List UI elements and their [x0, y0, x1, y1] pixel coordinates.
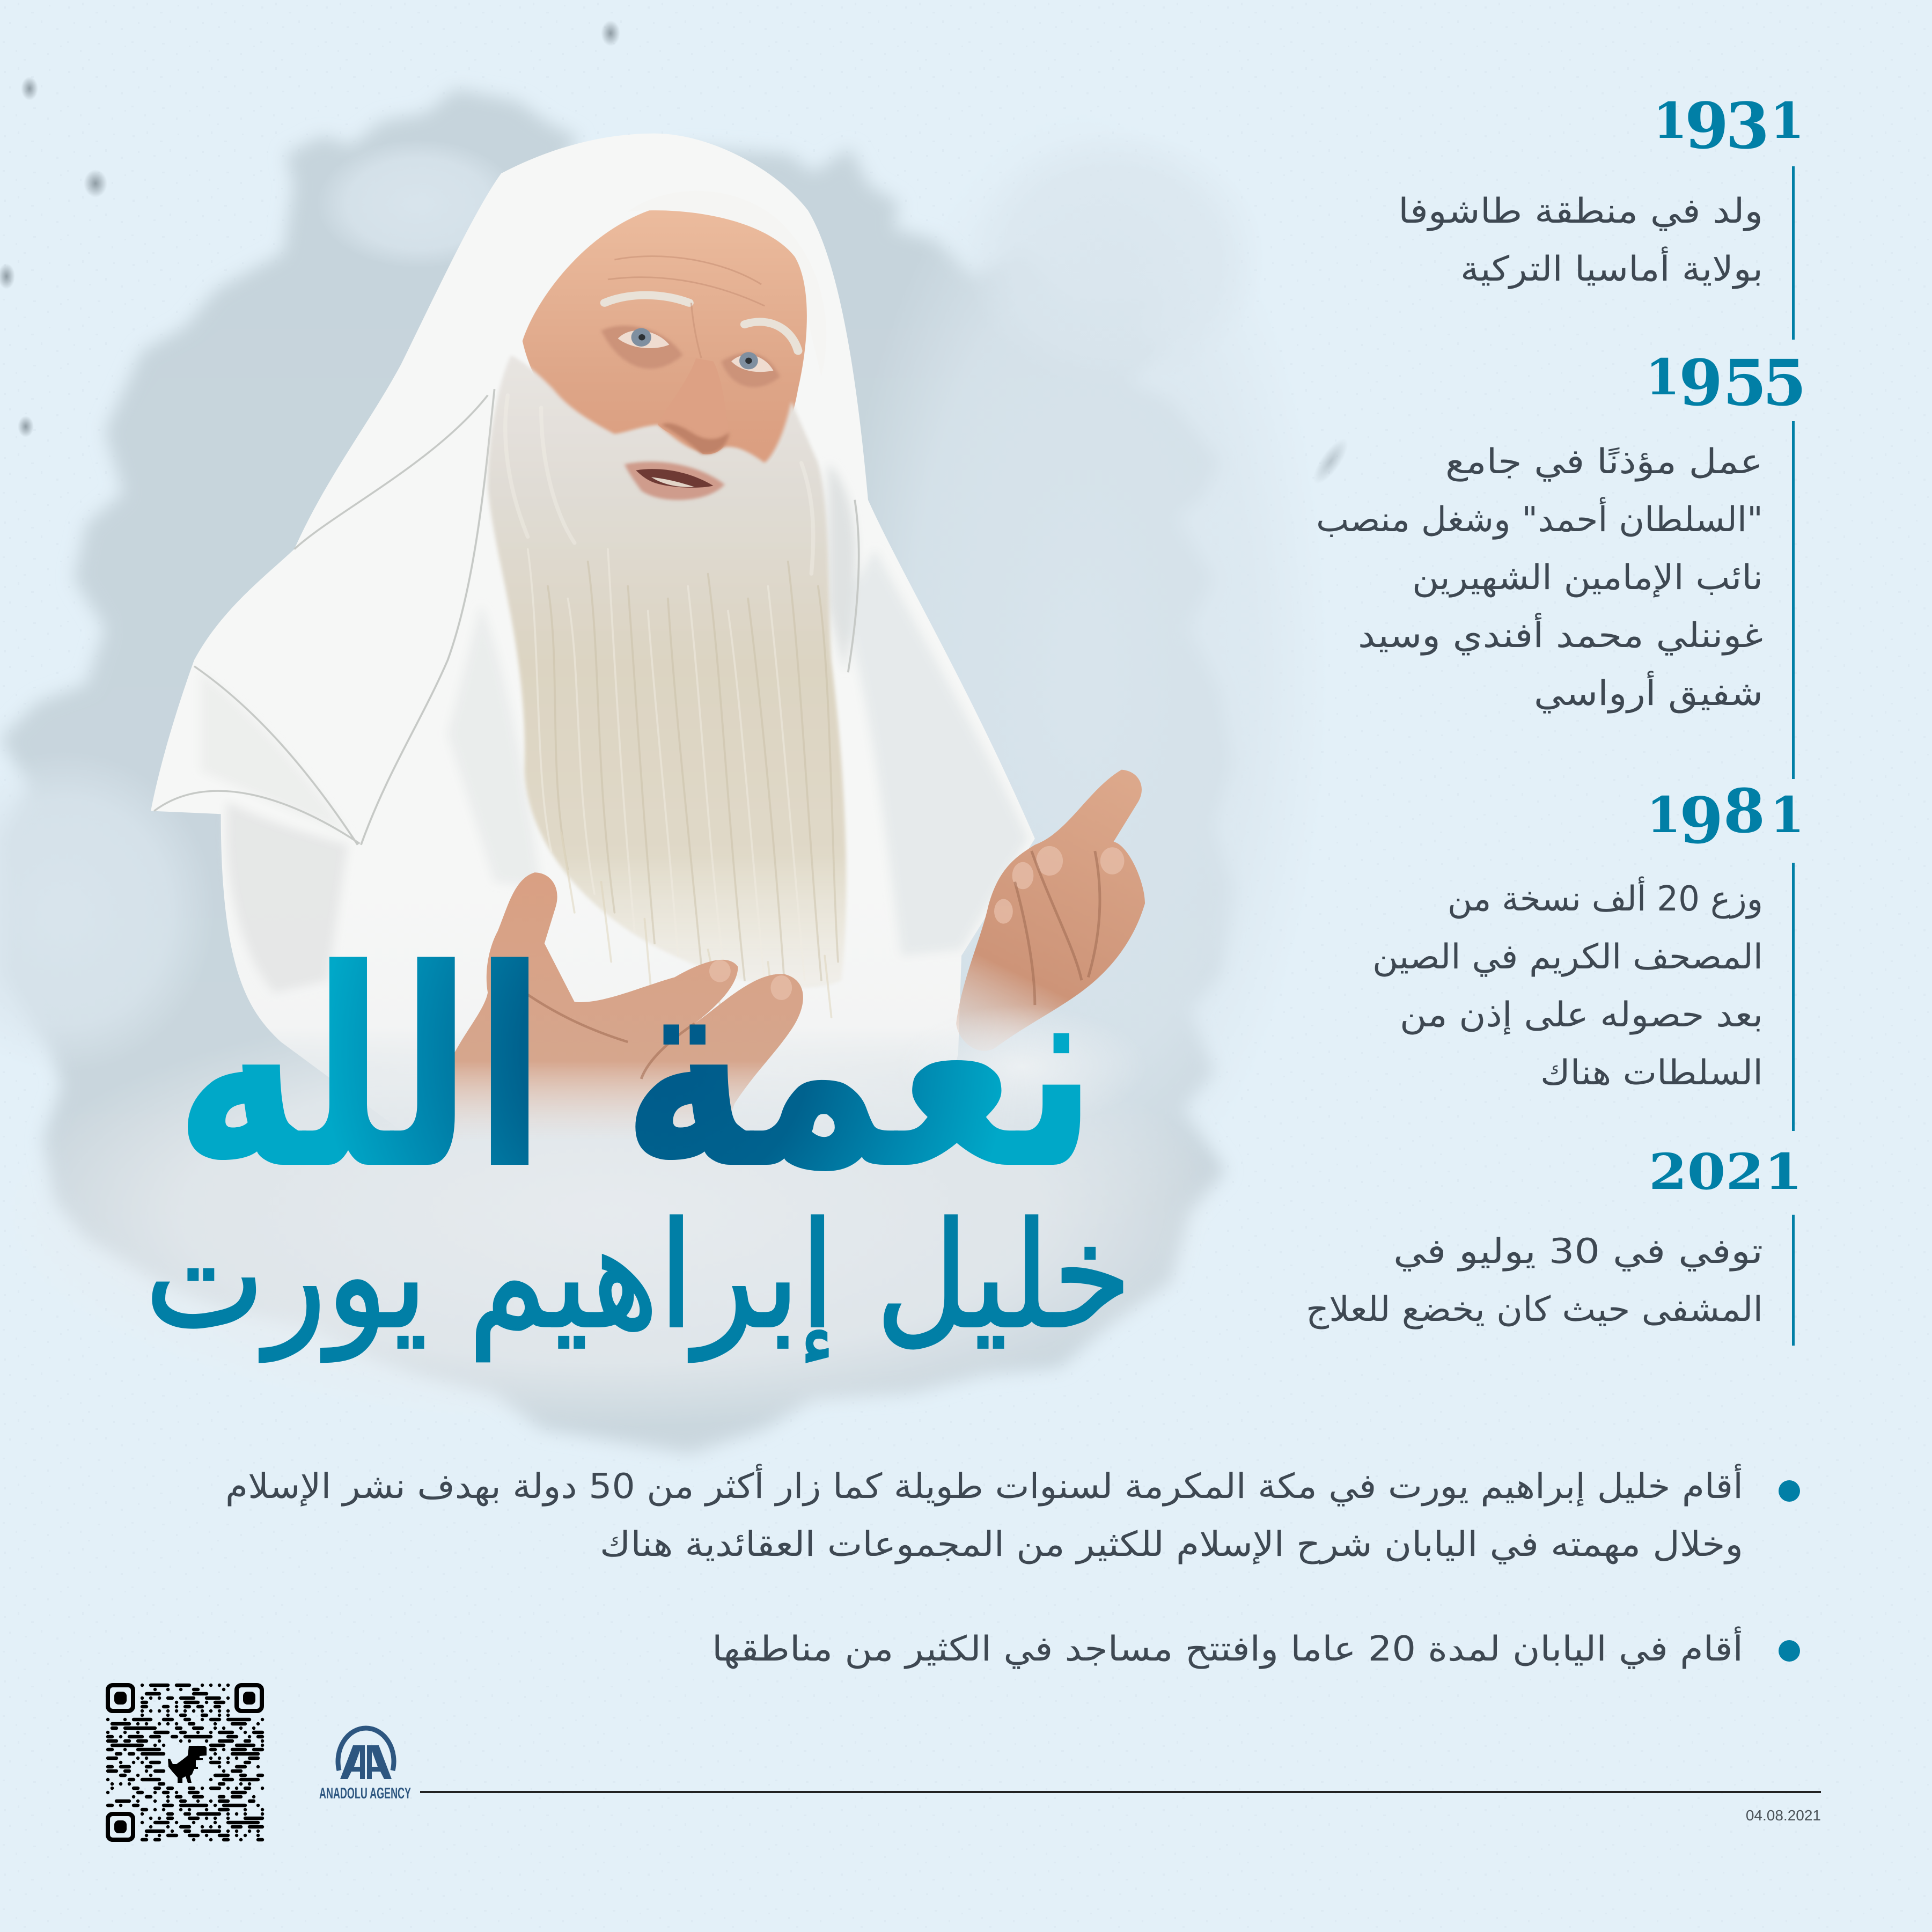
beard	[488, 355, 846, 1024]
2021 text: المشفى حيث كان يخضع للعلاج	[1306, 1290, 1763, 1329]
1981 text: وزع 20 ألف نسخة من	[1448, 876, 1763, 919]
nose	[658, 358, 729, 454]
face	[523, 210, 807, 497]
QR code	[108, 1685, 262, 1840]
fact 1: أقام خليل إبراهيم يورت في مكة المكرمة لسنوات طويلة كما زار أكثر من 50 دولة بهدف نشر الإسلام	[225, 1464, 1743, 1507]
timeline rule	[1792, 863, 1795, 1131]
year 1931: 9	[1685, 89, 1729, 163]
1955 text: نائب الإمامين الشهيرين	[1412, 558, 1763, 598]
1955 text: غوننلي محمد أفندي وسيد	[1358, 613, 1763, 656]
year 1931: 3	[1725, 89, 1769, 163]
year 2021: 2021	[1649, 1143, 1803, 1201]
1955 text	[1316, 442, 1763, 714]
timeline rule	[1792, 166, 1795, 340]
year 1981: 1	[1770, 786, 1804, 844]
QR finder centres	[114, 1692, 255, 1833]
white dust over hands	[895, 1005, 1148, 1128]
timeline rule	[1792, 1215, 1795, 1346]
timeline 1931	[1398, 89, 1804, 340]
fingernails and creases	[709, 846, 1125, 1000]
bullet dot 2	[1779, 1640, 1800, 1662]
forehead wrinkles	[608, 256, 765, 358]
1931 text: ولد في منطقة طاشوفا	[1398, 192, 1763, 231]
QR finder squares	[108, 1685, 262, 1840]
lighter patches in the wash	[837, 107, 1331, 1234]
2021 text: توفي في 30 يوليو في	[1393, 1232, 1763, 1272]
year 1955: 1	[1645, 348, 1680, 406]
fact 2: أقام في اليابان لمدة 20 عاما وافتتح مساجد في الكثير من مناطقها	[712, 1626, 1743, 1669]
fact 1: وخلال مهمته في اليابان شرح الإسلام للكثير من المجموعات العقائدية هناك	[600, 1525, 1743, 1564]
left hand	[447, 872, 803, 1141]
1981 text: السلطات هناك	[1540, 1053, 1763, 1093]
timeline rule	[1792, 421, 1795, 779]
fact 1	[225, 1464, 1743, 1564]
background specks	[0, 20, 1354, 489]
beard strands	[505, 395, 838, 1024]
lighter wash behind the title	[0, 998, 1229, 1427]
beard mass	[488, 355, 846, 988]
mouth	[636, 469, 713, 488]
logo AA letters	[340, 1745, 392, 1779]
timeline 1981	[1372, 776, 1804, 1131]
1981 text	[1372, 876, 1763, 1093]
year 1981: 8	[1723, 776, 1765, 847]
robe and hood silhouette	[151, 134, 1035, 1141]
year 1981: 1	[1647, 786, 1681, 844]
bullet dot 1	[1779, 1480, 1800, 1502]
logo arc	[338, 1728, 394, 1771]
1981 text: بعد حصوله على إذن من	[1400, 995, 1763, 1035]
QR modules	[108, 1685, 262, 1840]
year 1931: 1	[1770, 92, 1804, 150]
1955 text: شفيق أرواسي	[1534, 671, 1763, 714]
eyes	[601, 326, 780, 387]
logo wordmark: ANADOLU AGENCY	[319, 1785, 411, 1802]
1955 text: عمل مؤذنًا في جامع	[1445, 442, 1763, 482]
year 1955: 5	[1723, 346, 1767, 420]
2021 text	[1306, 1232, 1763, 1329]
date: 04.08.2021	[1746, 1807, 1821, 1824]
lips	[625, 461, 725, 500]
right hand	[956, 770, 1145, 1051]
year 1931: 1	[1653, 92, 1687, 150]
1981 text: المصحف الكريم في الصين	[1372, 937, 1763, 977]
year 1981: 9	[1679, 783, 1723, 858]
footer line	[420, 1791, 1821, 1793]
cape fold lines	[154, 389, 859, 845]
Anadolu Agency logo	[319, 1728, 411, 1802]
inner hood band	[628, 191, 826, 377]
eyebrows	[605, 295, 798, 351]
QR dinosaur icon	[168, 1746, 207, 1783]
1931 text: بولاية أماسيا التركية	[1460, 246, 1763, 289]
background watercolor blob	[0, 89, 1331, 1454]
1955 text: "السلطان أحمد" وشغل منصب	[1316, 497, 1763, 540]
portrait of Halil Ibrahim Yurt	[151, 134, 1148, 1141]
1931 text	[1398, 192, 1763, 289]
robe shading	[201, 463, 1028, 993]
timeline 2021	[1306, 1143, 1803, 1346]
year 1955: 9	[1679, 346, 1723, 420]
title: first line: نعمة الله	[174, 912, 1098, 1230]
bullet facts	[225, 1464, 1800, 1669]
title: name line: خليل إبراهيم يورت	[145, 1192, 1132, 1363]
timeline 1955	[1316, 346, 1806, 779]
year 1955: 5	[1762, 346, 1806, 420]
